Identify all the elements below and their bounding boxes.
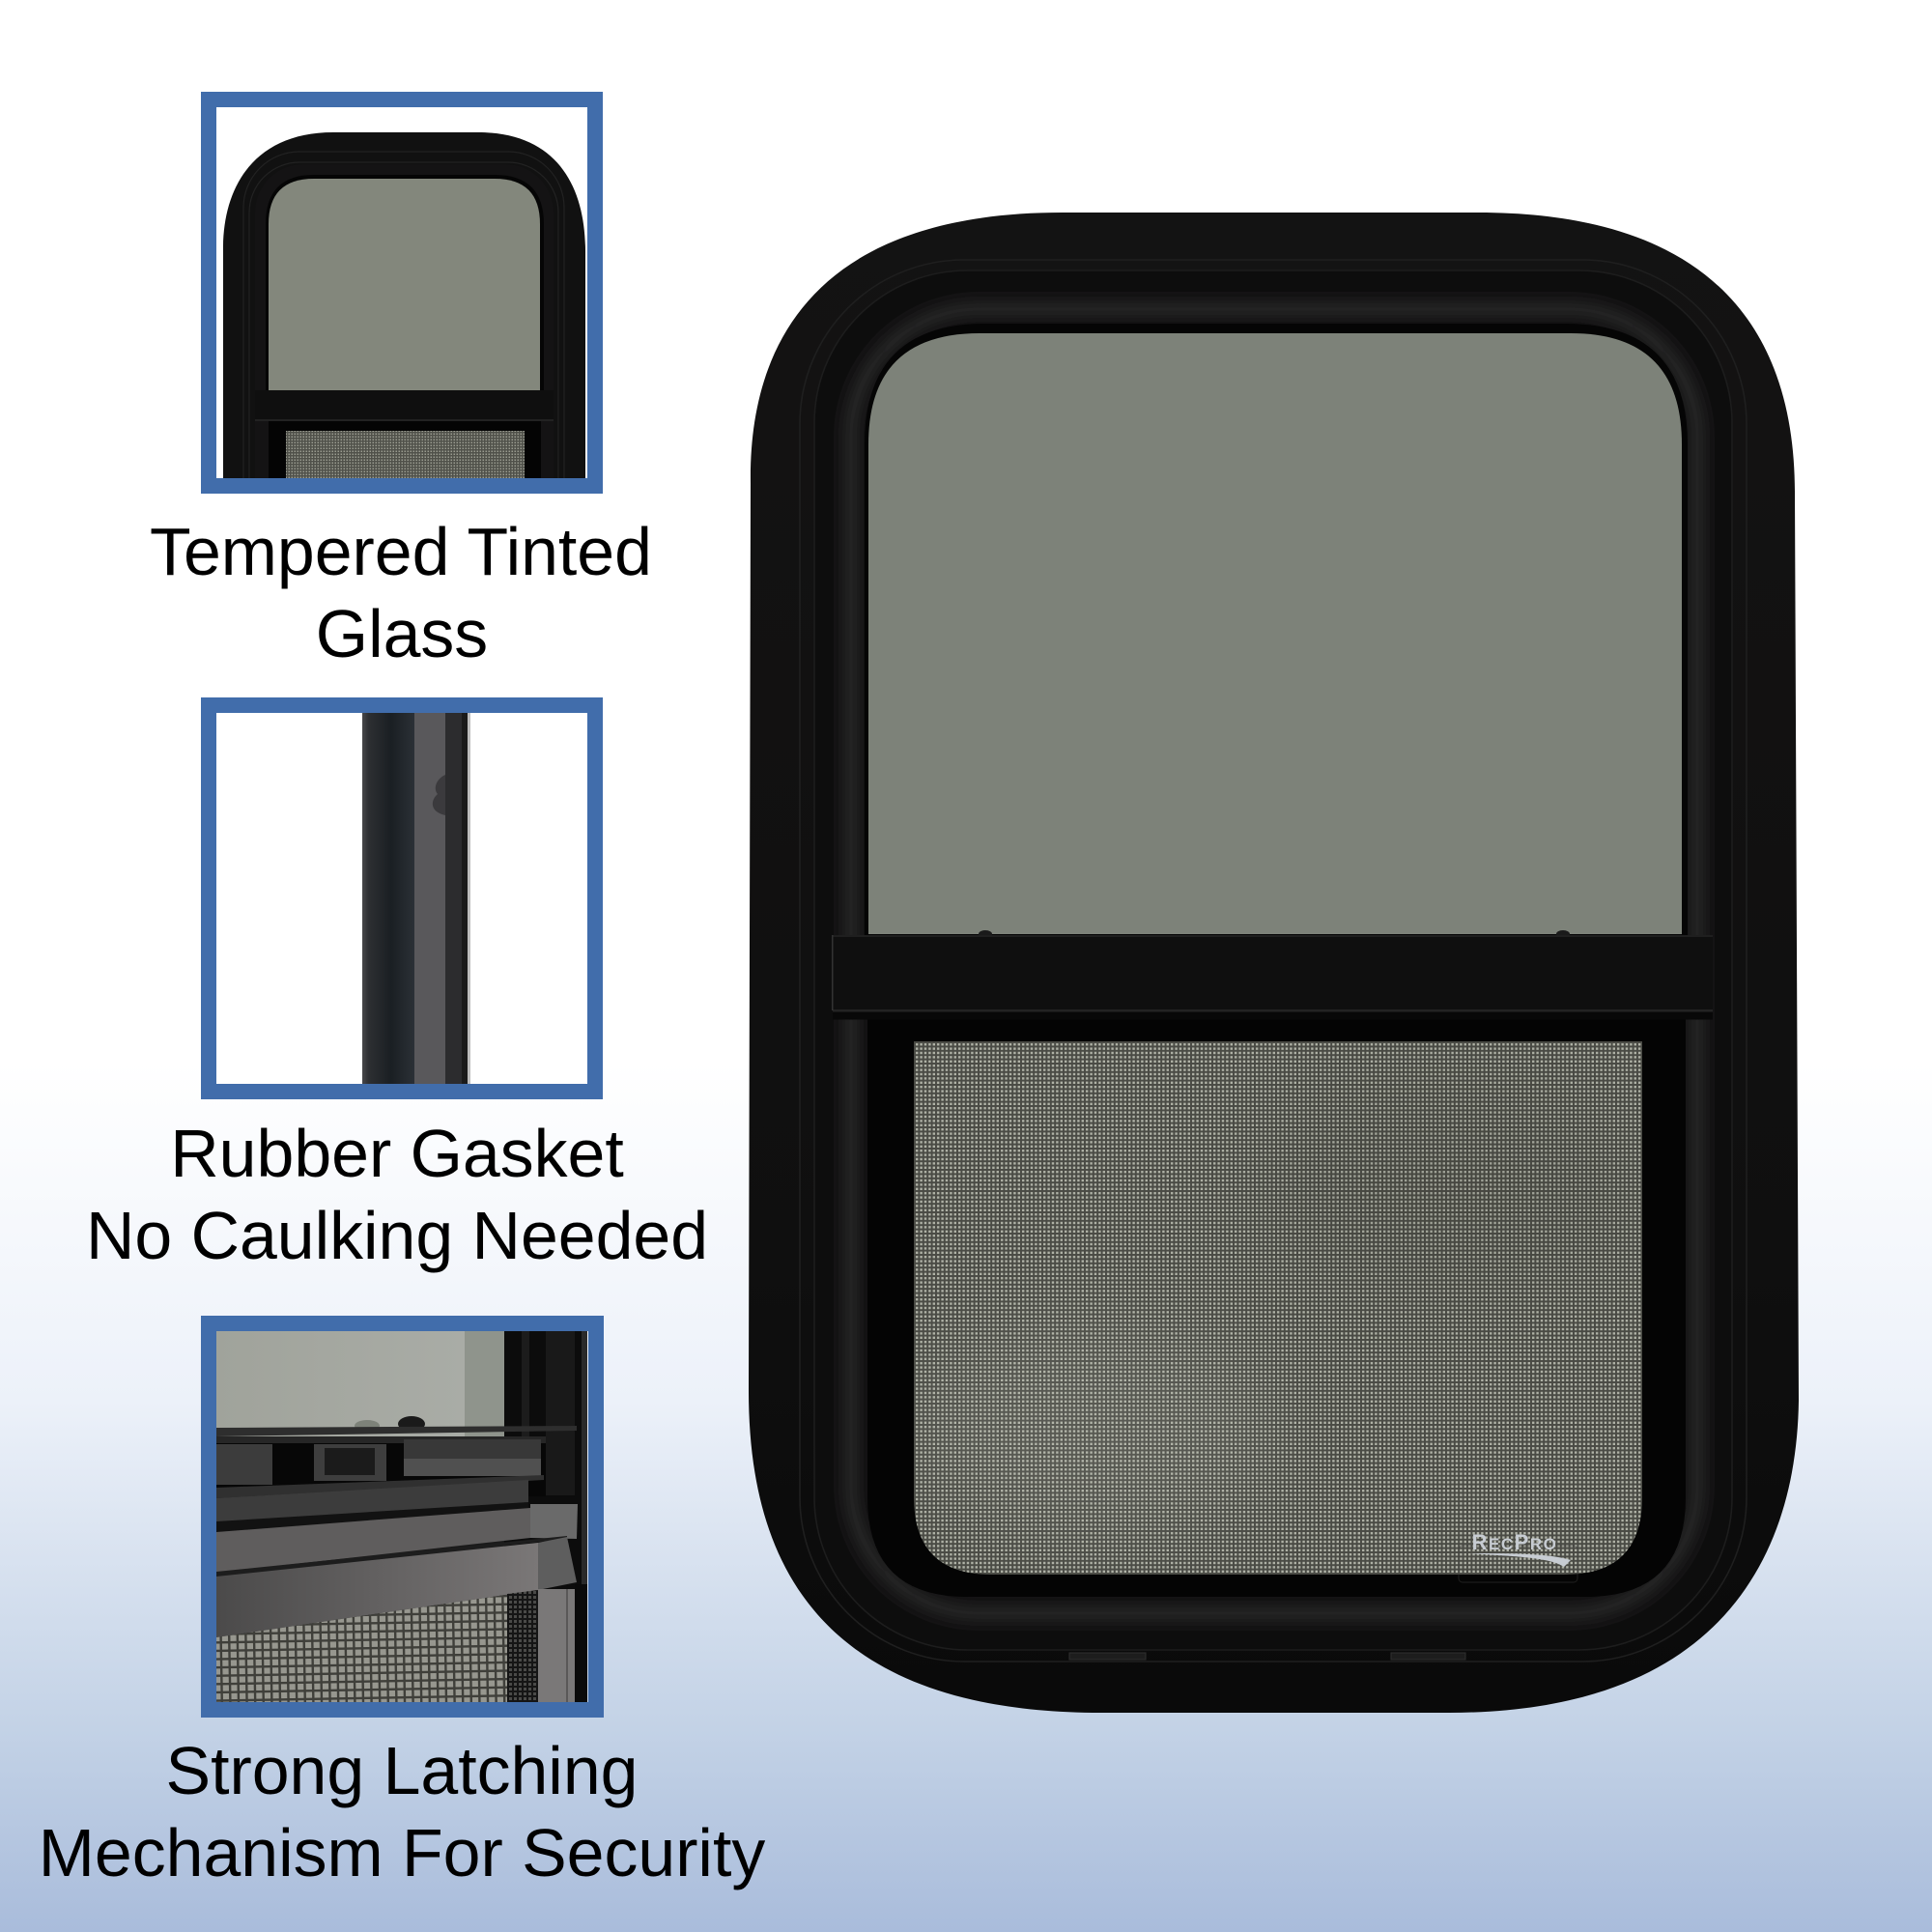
insect screen mesh <box>908 1041 1642 1575</box>
rounded inner frame tube <box>834 292 1715 1631</box>
caption: No Caulking Needed <box>86 1198 708 1273</box>
RecPro logo: RECPRO <box>1472 1530 1557 1554</box>
RecPro logo <box>1469 1530 1571 1567</box>
flange step lines <box>800 260 1747 1662</box>
feature 3: latching mechanism <box>39 1323 765 1890</box>
caption <box>150 514 652 671</box>
thumbnail: latch closeup <box>209 1323 596 1710</box>
black lower channel <box>867 1014 1686 1597</box>
window outer flange <box>749 213 1799 1713</box>
caption: Glass <box>316 596 488 671</box>
caption <box>86 1116 708 1273</box>
tinted glass pane <box>868 333 1682 934</box>
clear tab under logo <box>1459 1546 1577 1582</box>
thumbnail: window top <box>201 92 603 494</box>
bottom hinge latches <box>1069 1653 1465 1660</box>
feature 1: tempered tinted glass <box>150 99 652 671</box>
caption: Tempered Tinted <box>150 514 652 589</box>
frame tube highlight <box>851 309 1697 1613</box>
thumbnail: gasket side profile <box>209 705 595 1092</box>
caption: Mechanism For Security <box>39 1815 765 1890</box>
meeting rail bar <box>832 935 1713 1020</box>
glass catch bumps <box>979 930 1570 938</box>
main window product <box>749 213 1799 1713</box>
caption: Strong Latching <box>166 1733 638 1808</box>
feature 2: rubber gasket <box>86 705 708 1273</box>
caption <box>39 1733 765 1890</box>
caption: Rubber Gasket <box>170 1116 624 1191</box>
black upper channel <box>865 324 1688 937</box>
